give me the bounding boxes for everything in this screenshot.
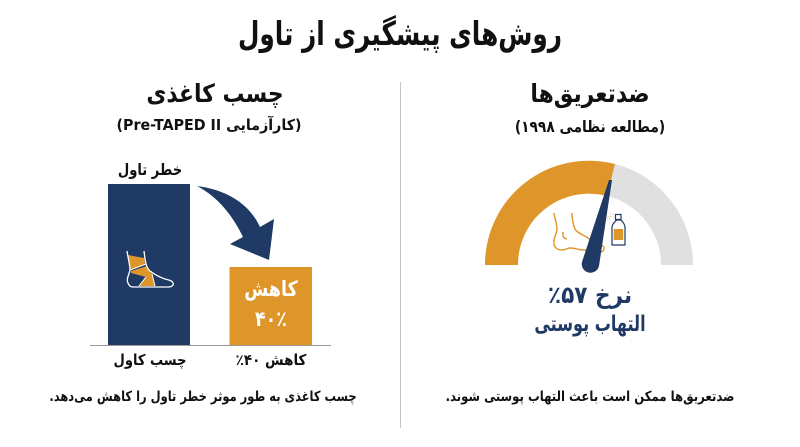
- subheading: military study: (مطالعه نظامی ۱۹۹۸): [515, 117, 665, 136]
- title: روش‌های پیشگیری از تاول: [238, 14, 562, 53]
- icon: taped foot: [127, 251, 173, 287]
- bar value label: [244, 277, 298, 331]
- note: paper tape: چسب کاغذی به طور موثر خطر تاول را کاهش می‌دهد.: [49, 389, 357, 405]
- bar: kinesiology tape: [108, 184, 190, 345]
- panel: paper tape: [49, 79, 357, 405]
- gauge remainder arc: [607, 164, 693, 265]
- icon: spray can: [607, 213, 625, 245]
- axis label: 40 percent reduction: کاهش ۴۰٪: [235, 351, 306, 369]
- center divider: [400, 82, 401, 428]
- bar value label: ۴۰٪: [255, 307, 287, 331]
- label: blister risk: خطر تاول: [117, 160, 182, 179]
- subheading: Pre-TAPED II trial: (کارآزمایی Pre-TAPED II): [116, 116, 301, 134]
- bar value label: کاهش: [244, 277, 297, 301]
- axis label: kinesiology tape: چسب کاول: [113, 351, 186, 369]
- gauge needle: [582, 180, 612, 273]
- note: antiperspirant: ضدتعریق‌ها ممکن است باعث التهاب پوستی شوند.: [446, 389, 734, 405]
- gauge value arc: [485, 161, 615, 265]
- panel: antiperspirant: [446, 79, 734, 405]
- bar chart: [90, 184, 331, 346]
- arrow: reduction: [197, 186, 274, 260]
- heading: antiperspirant: ضدتعریق‌ها: [530, 79, 650, 108]
- gauge chart: [485, 160, 693, 273]
- heading: paper tape: چسب کاغذی: [146, 79, 284, 108]
- gauge caption: التهاب پوستی: [534, 312, 646, 337]
- bar: paper tape: [230, 267, 312, 345]
- icon: foot: [554, 213, 604, 252]
- baseline: [90, 344, 331, 346]
- gauge value label: نرخ ۵۷٪: [548, 281, 632, 309]
